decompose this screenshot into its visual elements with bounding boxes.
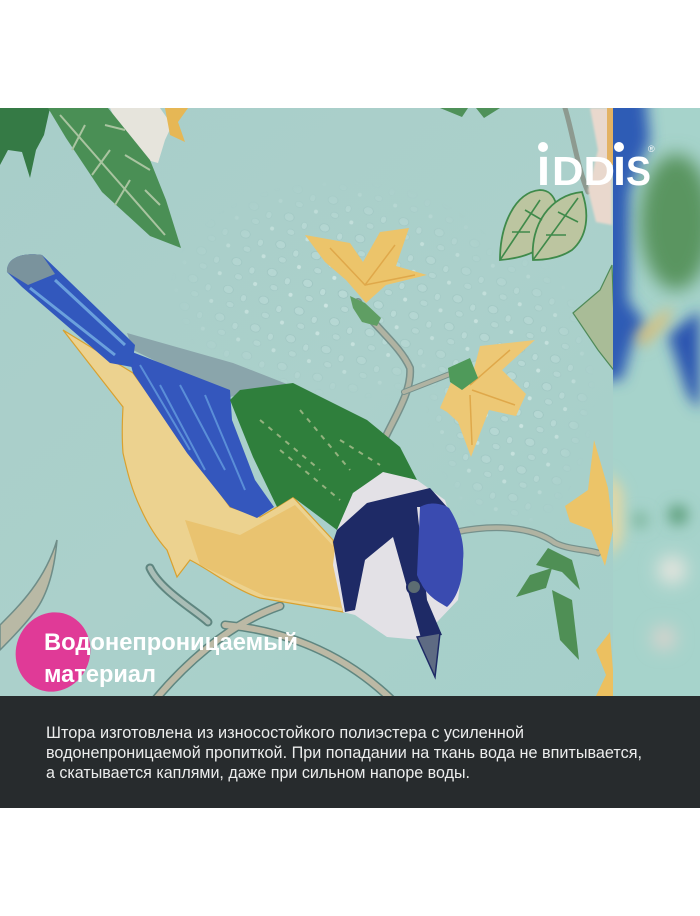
heading: материал bbox=[44, 661, 156, 688]
stems bbox=[358, 108, 598, 553]
navy stripes bbox=[333, 488, 447, 638]
bird body bbox=[63, 330, 343, 612]
green leaves lower right bbox=[516, 548, 580, 660]
description text: а скатывается каплями, даже при сильном напоре воды. bbox=[46, 764, 470, 782]
yellow flower, middle bbox=[440, 340, 535, 457]
bird bbox=[7, 254, 463, 677]
lower branches bbox=[0, 540, 392, 700]
tail bbox=[7, 254, 135, 367]
water droplets bbox=[202, 194, 582, 510]
head bbox=[333, 472, 463, 640]
description text: водонепроницаемой пропиткой. При попадании на ткань вода не впитывается, bbox=[46, 744, 642, 762]
green back bbox=[230, 383, 417, 530]
description text bbox=[46, 724, 642, 782]
heading: Водонепроницаемый bbox=[44, 629, 298, 656]
top-left foliage bbox=[0, 108, 500, 248]
infographic canvas bbox=[0, 108, 700, 808]
yellow flower, top bbox=[305, 228, 427, 326]
logo: IDDIS: I bbox=[613, 148, 626, 194]
heading bbox=[44, 629, 298, 688]
blurred right part of curtain bbox=[613, 108, 700, 696]
fabric background bbox=[0, 108, 613, 696]
logo: IDDIS: DD bbox=[552, 148, 615, 194]
top-right leaves bbox=[500, 108, 616, 373]
description text: Штора изготовлена из износостойкого полиэстера с усиленной bbox=[46, 724, 524, 742]
blue wing bbox=[127, 350, 274, 518]
right yellow flower bbox=[565, 440, 615, 696]
photo: curtain fabric with bird bbox=[0, 90, 700, 700]
logo: IDDIS bbox=[537, 142, 655, 194]
eye bbox=[407, 580, 421, 594]
logo: IDDIS: S bbox=[626, 148, 651, 194]
pink blob behind heading bbox=[5, 602, 101, 702]
dark description panel bbox=[0, 696, 700, 808]
logo: IDDIS: ® bbox=[648, 144, 655, 154]
gray back strip bbox=[127, 333, 287, 397]
blue cap bbox=[417, 503, 463, 607]
beak bbox=[417, 633, 440, 677]
logo: IDDIS: I bbox=[537, 148, 550, 194]
